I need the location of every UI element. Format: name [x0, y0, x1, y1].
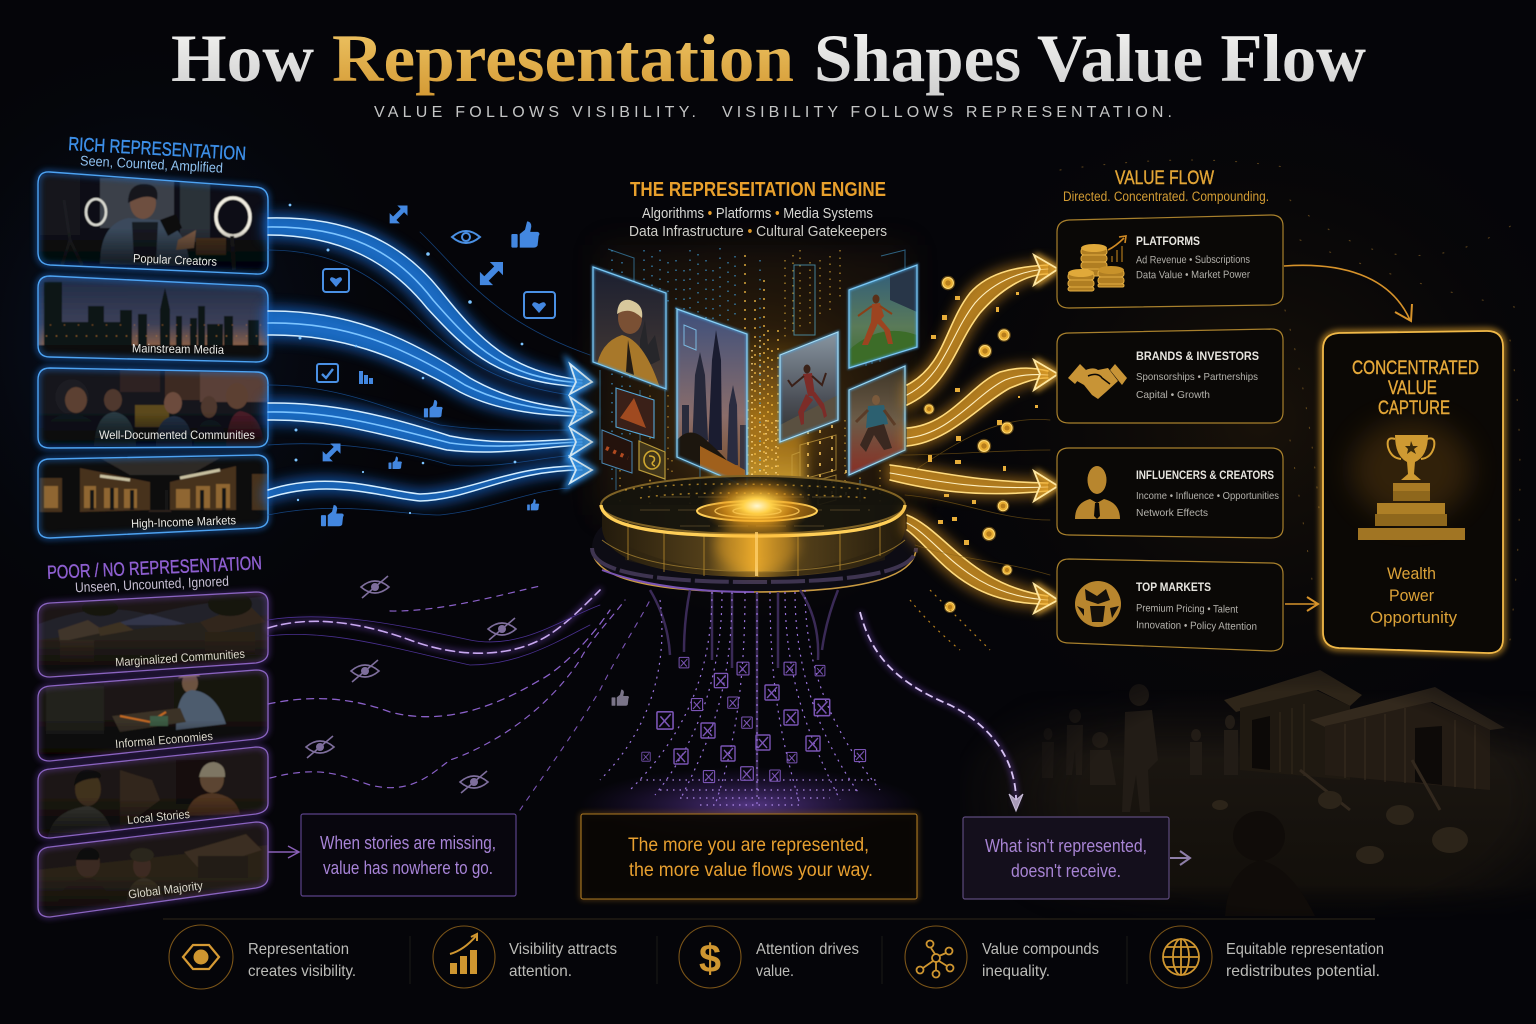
blue flow arrows into engine — [268, 204, 590, 515]
footer takeaways — [163, 919, 1384, 989]
small panel: temple — [616, 388, 654, 438]
takeaway: attention: $ — [699, 937, 721, 981]
icon: globe — [1075, 581, 1121, 627]
panel: concentrated value capture: VALUE — [1388, 378, 1437, 399]
panel: influencers and creators: Income • Influence • Opportunities — [1136, 490, 1279, 502]
arrow: platforms to value capture — [1284, 265, 1412, 321]
icon: gold flow arrowheads — [1034, 255, 1058, 613]
holographic panel: runner — [778, 330, 840, 445]
takeaway: representation: creates visibility. — [248, 963, 356, 980]
card: local stories: Local Stories — [126, 807, 191, 827]
panel: rich representation cards — [36, 170, 270, 542]
icons: cancelled engagement symbols — [612, 657, 866, 783]
panel: platforms: PLATFORMS — [1136, 234, 1200, 248]
subtitle — [374, 104, 1172, 121]
engine heading: Algorithms • Platforms • Media Systems — [642, 206, 873, 222]
takeaway: equitable — [1150, 926, 1384, 988]
holographic panel: city towers — [675, 305, 750, 490]
gold flow arrows out of engine — [890, 265, 1050, 604]
engine heading — [629, 179, 887, 240]
panel: platforms: Ad Revenue • Subscriptions — [1136, 254, 1250, 266]
takeaway: attention: Attention drives — [756, 941, 859, 958]
takeaway: compounding: inequality. — [982, 963, 1050, 980]
icon: trophy on podium — [1351, 420, 1471, 540]
panel: influencers and creators — [1057, 448, 1283, 538]
card: marginalized communities — [36, 590, 270, 680]
lower disc — [592, 510, 916, 592]
icons: crossed-out eyes — [306, 576, 516, 793]
representation engine — [561, 226, 925, 593]
heading: value flow — [1063, 168, 1269, 204]
gold value particles — [910, 276, 1038, 650]
engine heading: Data Infrastructure • Cultural Gatekeepers — [629, 224, 887, 240]
panel: concentrated value capture: Wealth — [1387, 564, 1436, 583]
panel: top markets — [1057, 559, 1283, 651]
engine heading: THE REPRESEITATION ENGINE — [630, 179, 886, 201]
card: high-income markets: High-Income Markets — [131, 513, 236, 531]
icon: blue flow arrowheads — [570, 364, 592, 483]
panel: brands and investors — [1057, 329, 1283, 423]
panel: concentrated value capture: Power — [1389, 586, 1434, 605]
panel: brands and investors: Sponsorships • Partnerships — [1136, 371, 1258, 383]
takeaway: attention — [679, 926, 859, 988]
upper disc platform — [601, 476, 905, 577]
background wireframe frames — [600, 249, 905, 505]
takeaway: representation — [169, 925, 356, 989]
takeaway: equitable: redistributes potential. — [1226, 963, 1380, 980]
panel: brands and investors: BRANDS & INVESTORS — [1136, 349, 1259, 363]
card: popular creators — [36, 170, 270, 276]
card: global majority — [36, 820, 270, 920]
purple dashed broken flows — [268, 586, 650, 810]
holographic panel: woman portrait — [590, 262, 670, 392]
panel: concentrated value capture: Opportunity — [1370, 608, 1457, 627]
foreground child — [1225, 811, 1315, 916]
callout: stories missing: value has nowhere to go. — [323, 858, 493, 878]
subtitle: VALUE FOLLOWS VISIBILITY. — [374, 104, 696, 121]
takeaway: visibility — [433, 926, 617, 988]
callout: not represented: doesn't receive. — [1011, 861, 1121, 881]
data rain — [612, 248, 880, 510]
panel: top markets: Premium Pricing • Talent — [1136, 602, 1238, 616]
title: Representation — [332, 20, 794, 96]
callout: stories missing: When stories are missing, — [320, 833, 496, 853]
small panel: gold emblem — [639, 441, 665, 479]
takeaway: representation: Representation — [248, 941, 349, 958]
card: well-documented communities — [36, 366, 270, 450]
callout: more represented — [581, 814, 917, 899]
heading: rich representation: Seen, Counted, Amplified — [80, 152, 223, 176]
card: informal economies: Informal Economies — [115, 729, 213, 751]
card: mainstream media — [36, 274, 270, 365]
panel: concentrated value capture: CAPTURE — [1378, 398, 1450, 419]
takeaway: attention: value. — [756, 963, 794, 980]
card: well-documented communities: Well-Documented Communities — [99, 428, 255, 442]
takeaway: visibility: attention. — [509, 963, 572, 980]
callout: more represented: The more you are represented, — [628, 835, 869, 856]
heading: poor representation: POOR / NO REPRESENTATION — [47, 553, 262, 584]
panel: top markets: TOP MARKETS — [1136, 580, 1211, 594]
takeaway: compounding — [905, 926, 1099, 988]
purple drips under engine — [580, 590, 920, 843]
panel: influencers and creators: INFLUENCERS & CREATORS — [1136, 468, 1274, 482]
icons: blue engagement symbols — [317, 206, 555, 526]
heading: poor representation — [47, 553, 262, 595]
callout: not represented: What isn't represented, — [985, 836, 1147, 856]
arrow: global majority to callout — [268, 846, 299, 858]
heading: value flow: Directed. Concentrated. Compounding. — [1063, 189, 1269, 204]
card: informal economies — [36, 668, 270, 763]
panel: influencers and creators: Network Effects — [1136, 507, 1208, 519]
card: mainstream media: Mainstream Media — [132, 341, 224, 357]
illustration: village scene — [960, 670, 1536, 920]
panel: brands and investors: Capital • Growth — [1136, 389, 1210, 401]
callout: more represented: the more value flows your way. — [629, 860, 873, 881]
hut left — [1224, 670, 1362, 780]
panel: platforms — [1057, 215, 1283, 308]
arrow: callout outward — [1170, 851, 1190, 865]
title — [171, 20, 1366, 96]
arrow: engine to unrepresented — [860, 612, 1023, 811]
card: local stories — [36, 745, 270, 840]
holographic panel: warrior — [847, 362, 907, 478]
title: Shapes Value Flow — [814, 20, 1366, 96]
card: marginalized communities: Marginalized Communities — [115, 647, 245, 669]
small panel: embers — [602, 430, 632, 473]
heading: value flow: VALUE FLOW — [1115, 168, 1214, 189]
heading: rich representation — [68, 134, 247, 176]
panel: top markets: Innovation • Policy Attention — [1136, 619, 1257, 633]
icon: handshake — [1068, 364, 1127, 399]
callout: not represented — [963, 817, 1169, 899]
takeaway: visibility: Visibility attracts — [509, 941, 617, 958]
icon: person in suit — [1075, 466, 1120, 519]
panel: platforms: Data Value • Market Power — [1136, 269, 1250, 281]
icon: coin stacks with rising arrow — [1068, 236, 1126, 291]
hut right — [1300, 687, 1505, 810]
takeaway: equitable: Equitable representation — [1226, 941, 1384, 958]
card: global majority: Global Majority — [127, 878, 204, 901]
heading: poor representation: Unseen, Uncounted, Ignored — [75, 573, 229, 595]
takeaway: compounding: Value compounds — [982, 941, 1099, 958]
heading: rich representation: RICH REPRESENTATION — [68, 134, 247, 165]
panel: poor representation cards — [36, 590, 270, 920]
arrow: top markets to value capture — [1285, 597, 1318, 611]
callout: stories missing — [301, 814, 516, 896]
panel: concentrated value capture: CONCENTRATED — [1352, 358, 1479, 379]
card: popular creators: Popular Creators — [133, 251, 217, 269]
subtitle: VISIBILITY FOLLOWS REPRESENTATION. — [722, 104, 1172, 121]
holographic panel: field athlete — [847, 262, 919, 370]
title: How — [171, 20, 314, 96]
people silhouettes — [1042, 684, 1238, 812]
card: high-income markets — [36, 453, 270, 542]
panel: concentrated value capture — [1323, 331, 1503, 653]
